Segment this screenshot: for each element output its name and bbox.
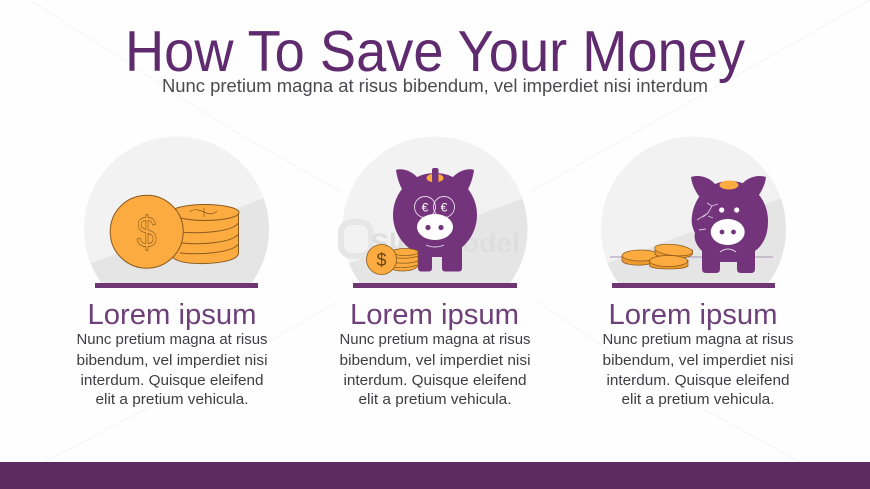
body text: interdum. Quisque eleifend xyxy=(80,372,264,389)
body text: interdum. Quisque eleifend xyxy=(344,372,526,389)
heading: Lorem ipsum xyxy=(88,299,256,331)
icon: happy piggy: € xyxy=(422,200,429,214)
icon: large dollar coin xyxy=(110,195,183,268)
body text: bibendum, vel imperdiet nisi xyxy=(340,352,530,369)
underline bar xyxy=(353,283,517,288)
body text: elit a pretium vehicula. xyxy=(622,391,774,408)
icon: sad cracked piggy xyxy=(691,176,768,273)
body text: elit a pretium vehicula. xyxy=(96,391,248,408)
circle backdrop xyxy=(343,136,528,283)
underline bar xyxy=(612,283,775,288)
icon: small dollar coin xyxy=(366,244,396,274)
icon: coin stack xyxy=(171,204,239,264)
body text: Nunc pretium magna at risus xyxy=(602,331,794,348)
body text: bibendum, vel imperdiet nisi xyxy=(602,352,794,369)
watermark xyxy=(341,222,520,258)
title: How To Save Your Money xyxy=(125,20,745,84)
body text: bibendum, vel imperdiet nisi xyxy=(76,352,268,369)
body text xyxy=(602,331,794,408)
subtitle: Nunc pretium magna at risus bibendum, vel imperdiet nisi interdum xyxy=(162,75,708,96)
heading: Lorem ipsum xyxy=(350,299,519,331)
body text: interdum. Quisque eleifend xyxy=(606,372,790,389)
icon: large dollar coin: $ xyxy=(137,208,157,257)
icon: happy piggy xyxy=(393,168,477,272)
body text: Nunc pretium magna at risus xyxy=(340,331,530,348)
panel: piggy bank xyxy=(329,136,530,408)
icon: happy piggy: € xyxy=(441,200,448,214)
underline bar xyxy=(95,283,258,288)
panel: coins xyxy=(70,136,270,408)
table line xyxy=(610,256,773,258)
circle backdrop xyxy=(84,136,269,283)
body text xyxy=(76,331,268,408)
body text xyxy=(340,331,530,408)
icon: small coin stack xyxy=(392,248,418,271)
body text: elit a pretium vehicula. xyxy=(358,391,512,408)
heading: Lorem ipsum xyxy=(608,299,778,331)
icon: scattered coins xyxy=(622,243,693,269)
footer bar xyxy=(0,462,870,489)
watermark: SlideModel xyxy=(370,228,520,258)
body text: Nunc pretium magna at risus xyxy=(76,331,268,348)
icon: small dollar coin: $ xyxy=(376,250,387,270)
circle backdrop xyxy=(601,136,786,283)
panel: broken piggy bank xyxy=(587,136,794,408)
